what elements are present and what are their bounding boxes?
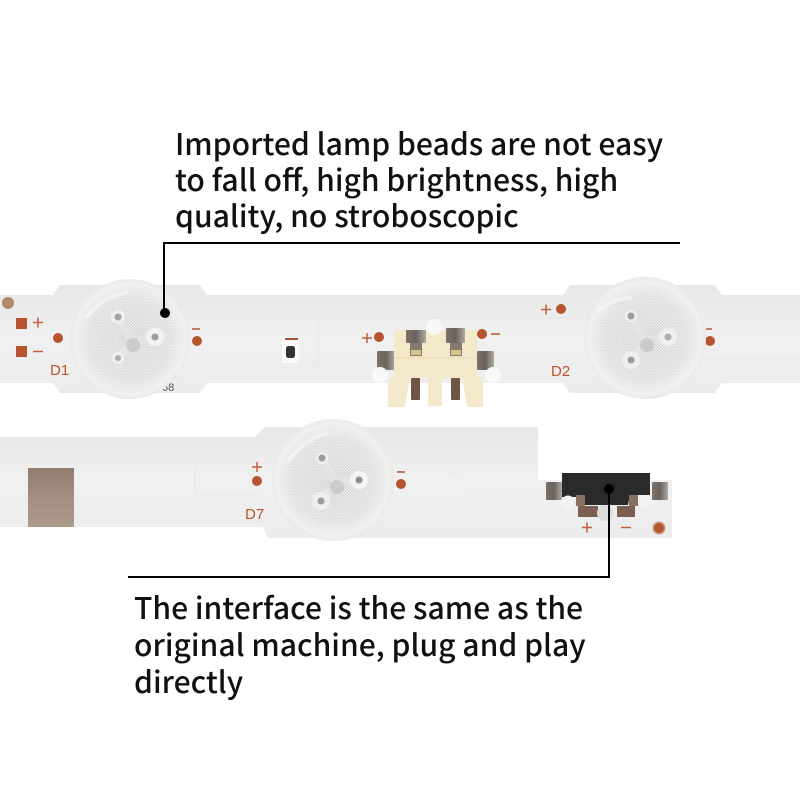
strip 1 traces <box>0 318 800 368</box>
minus mark D2 <box>705 329 715 346</box>
strip 1 board <box>0 285 800 393</box>
label D1: D1 <box>50 362 69 379</box>
text block: lamp beads <box>175 120 663 236</box>
panel: lower LED strip <box>0 419 672 541</box>
copper pad <box>28 468 74 527</box>
label D7: D7 <box>245 506 264 523</box>
minus mark D1 <box>192 329 202 346</box>
small SMD component <box>282 337 299 363</box>
callout line: lamp beads <box>160 243 680 318</box>
mounting hole <box>2 297 14 309</box>
connector: cream socket <box>372 319 501 407</box>
polarity marks D2 <box>541 304 566 314</box>
text block: lamp beads: quality, no stroboscopic <box>175 192 519 236</box>
callout line: interface <box>128 484 614 577</box>
polarity marks D7 <box>252 462 262 486</box>
text block: lamp beads: to fall off, high brightness, high <box>175 156 618 200</box>
connector: black socket <box>546 473 668 534</box>
minus mark D7 <box>396 472 406 489</box>
text block: lamp beads: Imported lamp beads are not easy <box>175 120 663 164</box>
text block: interface: original machine, plug and play <box>134 621 586 665</box>
lens D7 <box>272 419 394 541</box>
partial marking: 68 <box>162 382 174 394</box>
text block: interface: The interface is the same as the <box>134 584 583 628</box>
lens D2 <box>584 277 706 399</box>
polarity marks centre <box>362 329 500 343</box>
label D2: D2 <box>551 363 570 380</box>
text block: interface <box>134 584 586 702</box>
text block: interface: directly <box>134 658 243 702</box>
panel: upper LED strip <box>0 277 800 407</box>
lens D1 <box>70 279 190 399</box>
polarity pads D1 <box>16 318 63 357</box>
strip 2 board <box>0 427 672 538</box>
strip 2 traces <box>0 456 538 494</box>
